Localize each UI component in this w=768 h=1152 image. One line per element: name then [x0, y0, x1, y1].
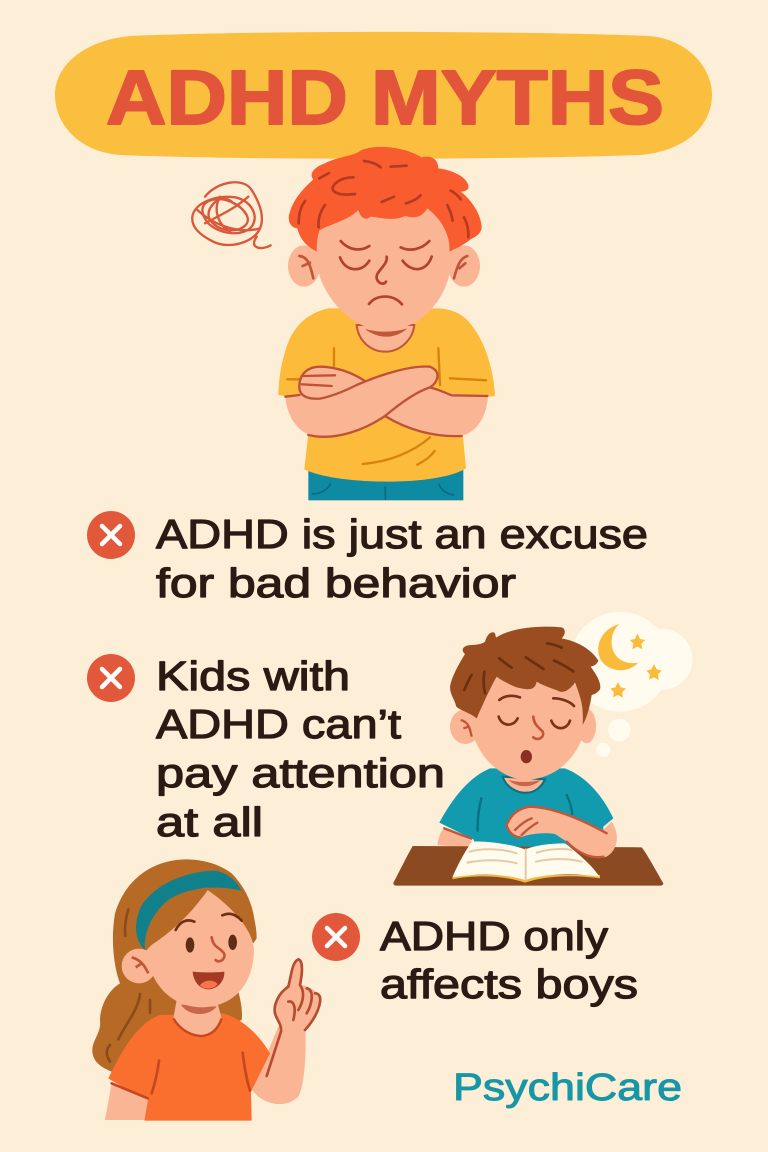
face [147, 890, 254, 1007]
illustration: sleepy boy at desk [393, 612, 692, 886]
open book [452, 842, 600, 883]
face [315, 200, 453, 330]
myth text: ADHD only [380, 913, 609, 959]
left arm [105, 1083, 148, 1120]
illustration: smiling girl pointing [92, 859, 322, 1121]
myth text: pay attention [156, 750, 445, 796]
mouth [521, 750, 532, 763]
thought cloud [570, 612, 692, 757]
facial features [499, 696, 574, 739]
neck shadow [508, 780, 541, 786]
logo: PsychiCare: PsychiCare [453, 1067, 682, 1109]
ears [288, 245, 480, 287]
icon: tangled scribble [192, 182, 271, 248]
orange shirt [108, 1013, 270, 1121]
arm [252, 1023, 306, 1104]
icon: red x [87, 654, 135, 702]
fringe hair [146, 887, 257, 948]
hair strands [107, 909, 150, 1062]
arm and hand [507, 807, 617, 858]
pointing hand [267, 959, 322, 1076]
headband [136, 871, 242, 950]
title banner: ADHD MYTHS [106, 55, 664, 141]
myth text: affects boys [380, 961, 638, 1007]
red hair [289, 147, 482, 252]
ears [450, 709, 596, 744]
title banner [55, 32, 712, 159]
back hair [92, 859, 255, 1072]
neck [503, 777, 545, 793]
myth 3 [312, 913, 638, 1007]
brown hair [450, 627, 600, 725]
neckline [173, 1018, 222, 1036]
icon: red x [87, 511, 135, 559]
smile [193, 972, 224, 989]
icon: red x [312, 913, 360, 961]
ear [122, 949, 156, 983]
facial features [340, 241, 432, 304]
eyes [186, 935, 237, 953]
body [437, 768, 613, 848]
crossed arms [285, 366, 488, 437]
myth text: ADHD is just an excuse [156, 511, 648, 557]
myth 2 [87, 653, 445, 845]
neck shadow [181, 1005, 217, 1014]
myth 1 [87, 511, 648, 606]
desk [393, 846, 663, 886]
facial features [176, 914, 242, 961]
neck shadow [365, 328, 407, 337]
myth text: Kids with [156, 653, 350, 699]
neck [357, 325, 414, 352]
neck [173, 1000, 222, 1036]
moon and stars [598, 624, 662, 698]
face [469, 663, 587, 780]
myth text: at all [156, 799, 263, 845]
myth text: ADHD can’t [156, 701, 402, 747]
jeans [308, 468, 463, 500]
illustration: angry boy with crossed arms [192, 147, 495, 500]
yellow shirt [278, 308, 495, 482]
myth text: for bad behavior [156, 560, 516, 606]
